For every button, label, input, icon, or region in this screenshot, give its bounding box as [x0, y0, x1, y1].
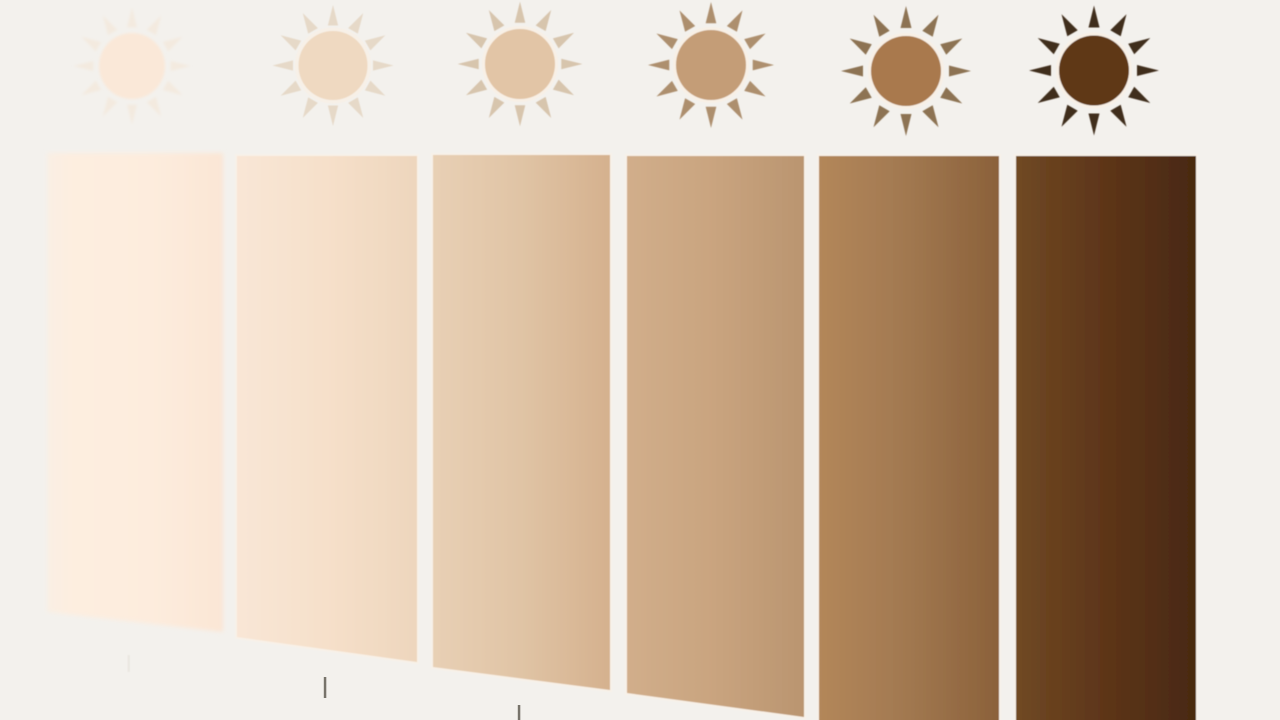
tick mark 3	[518, 705, 520, 720]
swatch bar 6	[1016, 156, 1196, 720]
icon: sun 3	[458, 2, 582, 126]
icon: sun 2	[273, 5, 393, 126]
swatch bar 2	[237, 156, 417, 662]
icon: sun 6, darkest	[1029, 6, 1159, 136]
tick mark 1, faint	[128, 655, 130, 672]
icon: sun 4	[648, 2, 774, 128]
icon: sun 1, palest	[74, 7, 190, 124]
icon: sun 5	[841, 6, 971, 136]
tick mark 2	[324, 677, 326, 698]
swatch bar 4	[627, 156, 804, 717]
swatch bar 5	[819, 156, 999, 720]
swatch bar 3	[433, 155, 610, 690]
swatch bar 1	[47, 153, 223, 632]
